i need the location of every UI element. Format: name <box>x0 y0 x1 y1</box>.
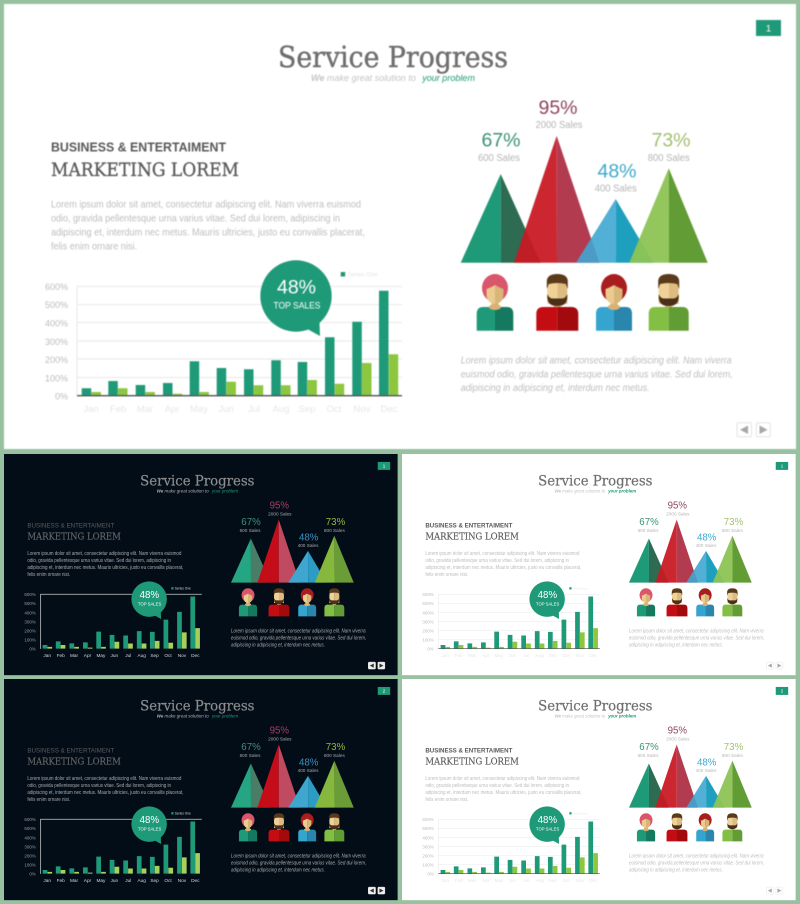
page badge <box>378 687 390 695</box>
title: Service Progress <box>538 473 652 489</box>
panel: light slide top right <box>402 454 796 675</box>
text block: italic paragraph: adipiscing in adipiscing et, interdum nec metus. <box>231 867 325 873</box>
panel: light slide bottom right <box>402 679 796 900</box>
bar chart: 0% <box>427 872 434 877</box>
bar chart: 600% <box>24 817 36 822</box>
bar chart: 100% <box>24 638 36 643</box>
triangle chart: 48% <box>597 161 637 183</box>
bar chart: Oct <box>562 653 570 659</box>
bar chart: Apr <box>482 653 490 659</box>
triangle chart: 95% <box>668 501 687 512</box>
subtitle: We make great solution to your problem <box>555 488 636 494</box>
bar chart: Jul <box>523 653 529 659</box>
bar chart: Series One <box>573 811 588 815</box>
bar chart: Series One <box>175 811 191 815</box>
icon: man red <box>269 813 289 841</box>
callout: 48% top sales: 48% <box>140 590 159 601</box>
text block: intro paragraph: felis enim ornare nisi. <box>51 240 137 252</box>
icon: man green <box>324 588 344 616</box>
bar chart: Oct <box>164 653 172 659</box>
bar chart: Series One <box>573 586 588 590</box>
page badge: 1 <box>781 464 784 469</box>
bar chart: 100% <box>422 863 434 868</box>
triangle chart: 67% <box>241 517 261 528</box>
callout: 48% top sales <box>529 581 565 619</box>
title: Service Progress <box>140 698 254 714</box>
bar chart: May <box>96 878 106 884</box>
bar chart: Feb <box>57 878 65 884</box>
triangle chart: 95% <box>538 97 578 119</box>
bar chart: 300% <box>24 619 36 624</box>
triangle chart: 2000 Sales <box>268 512 292 518</box>
triangle chart: 800 Sales <box>648 153 690 164</box>
text block: intro paragraph: felis enim ornare nisi. <box>425 797 468 803</box>
triangle chart: 48% <box>697 532 717 543</box>
icon: woman blue <box>696 813 714 841</box>
icon: man red <box>269 588 289 616</box>
icon: woman teal <box>477 274 513 331</box>
heading: marketing: MARKETING LOREM <box>425 756 519 767</box>
heading: marketing: MARKETING LOREM <box>27 531 121 542</box>
navigation arrows <box>368 887 385 894</box>
bar chart: 200% <box>422 853 434 858</box>
text block: italic paragraph: euismod odio, gravida pellentesque urna varius vitae. Sed dui lorem, <box>231 636 366 642</box>
callout: 48% top sales <box>260 260 332 336</box>
triangle chart: 73% <box>724 517 744 528</box>
bar chart: Dec <box>191 878 200 884</box>
callout: 48% top sales <box>529 806 565 844</box>
text block: intro paragraph: odio, gravida pellentesque urna varius vitae. Sed dui lorem, adipiscing in <box>425 783 569 789</box>
callout: 48% top sales <box>131 581 167 619</box>
bar chart: 200% <box>24 853 36 858</box>
bar chart: 600% <box>422 817 434 822</box>
icon: man green <box>649 274 689 331</box>
subtitle: We make great solution to your problem <box>311 73 475 84</box>
bar chart: Jan <box>43 653 51 659</box>
icon: woman blue <box>298 588 316 616</box>
page badge: 2 <box>781 689 784 694</box>
bar chart: Dec <box>191 653 200 659</box>
navigation arrows <box>737 423 770 437</box>
triangle chart: 67% <box>241 742 261 753</box>
icon: man red <box>667 813 687 841</box>
triangle chart: 48% <box>697 757 717 768</box>
callout: 48% top sales: 48% <box>277 276 316 298</box>
bar chart: Jul <box>248 404 260 415</box>
text block: intro paragraph: felis enim ornare nisi. <box>27 797 70 803</box>
bar chart: 600% <box>45 282 68 292</box>
text block: intro paragraph: adipiscing et, interdum nec metus. Mauris ultricies, justo eu convallis placerat, <box>27 565 183 571</box>
icon: woman blue <box>696 588 714 616</box>
bar chart: Jan <box>441 653 449 659</box>
callout: 48% top sales: TOP SALES <box>138 601 161 607</box>
bar chart <box>24 586 202 659</box>
bar chart: Aug <box>273 404 289 415</box>
bar chart: 400% <box>422 835 434 840</box>
bar chart <box>24 811 202 884</box>
navigation arrows <box>766 887 783 894</box>
triangle chart: 2000 Sales <box>666 512 690 518</box>
text block: italic paragraph: Lorem ipsum dolor sit amet, consectetur adipiscing elit. Nam viverra <box>231 854 366 860</box>
bar chart: 400% <box>45 318 68 328</box>
bar chart: 300% <box>422 619 434 624</box>
bar chart: Series One <box>175 586 191 590</box>
bar chart: Sep <box>150 653 159 659</box>
bar chart: Feb <box>110 404 126 415</box>
heading: business: BUSINESS & ENTERTAIMENT <box>425 747 512 754</box>
bar chart: Jun <box>509 653 517 659</box>
bar chart: 400% <box>422 610 434 615</box>
bar chart: Jun <box>111 653 119 659</box>
bar chart: Mar <box>70 878 79 884</box>
text block: italic paragraph: euismod odio, gravida pellentesque urna varius vitae. Sed dui lorem, <box>231 861 366 867</box>
bar chart: May <box>494 653 504 659</box>
bar chart: 200% <box>45 355 68 365</box>
bar chart: 100% <box>24 863 36 868</box>
triangle chart: 73% <box>326 742 346 753</box>
bar chart: Jul <box>125 878 131 884</box>
title: Service Progress <box>140 473 254 489</box>
bar chart: 300% <box>24 844 36 849</box>
triangle chart: 400 Sales <box>696 543 717 549</box>
bar chart: Sep <box>548 653 557 659</box>
bar chart: Sep <box>548 878 557 884</box>
text block: intro paragraph: odio, gravida pellentesque urna varius vitae. Sed dui lorem, adipiscing in <box>425 558 569 564</box>
heading: marketing: MARKETING LOREM <box>51 159 239 181</box>
triangle chart <box>629 726 752 808</box>
triangle chart: 800 Sales <box>722 753 743 759</box>
bar chart: Nov <box>576 878 585 884</box>
page badge <box>776 687 788 695</box>
navigation arrows <box>368 662 385 669</box>
text block: intro paragraph <box>27 551 183 578</box>
bar chart: Mar <box>137 404 153 415</box>
icon: woman teal <box>239 813 257 841</box>
bar chart: Apr <box>84 878 92 884</box>
icon: woman teal <box>637 588 655 616</box>
bar chart: Dec <box>589 878 598 884</box>
triangle chart <box>461 97 708 263</box>
bar chart: 200% <box>422 628 434 633</box>
text block: intro paragraph: felis enim ornare nisi. <box>425 572 468 578</box>
title: Service Progress <box>538 698 652 714</box>
text block: italic paragraph: Lorem ipsum dolor sit amet, consectetur adipiscing elit. Nam viverra <box>629 854 764 860</box>
text block: italic paragraph <box>461 354 733 394</box>
heading: business: BUSINESS & ENTERTAIMENT <box>27 522 114 529</box>
text block: italic paragraph <box>629 629 764 648</box>
heading: marketing: MARKETING LOREM <box>27 756 121 767</box>
icon: man green <box>722 588 742 616</box>
triangle chart: 48% <box>299 757 319 768</box>
subtitle: We make great solution to your problem <box>555 713 636 719</box>
bar chart: Sep <box>150 878 159 884</box>
bar chart: Feb <box>57 653 65 659</box>
bar chart: 500% <box>422 601 434 606</box>
bar chart: May <box>190 404 208 415</box>
text block: italic paragraph: adipiscing in adipiscing et, interdum nec metus. <box>629 867 723 873</box>
bar chart: 0% <box>29 872 36 877</box>
page badge <box>776 462 788 470</box>
icon: man green <box>324 813 344 841</box>
bar chart: Apr <box>482 878 490 884</box>
triangle chart: 67% <box>639 742 659 753</box>
bar chart: 600% <box>24 592 36 597</box>
bar chart: Jun <box>111 878 119 884</box>
bar chart: Dec <box>381 404 398 415</box>
text block: italic paragraph: adipiscing in adipiscing et, interdum nec metus. <box>629 642 723 648</box>
panel: main light slide <box>4 4 796 449</box>
triangle chart: 400 Sales <box>298 543 319 549</box>
bar chart: Jun <box>218 404 234 415</box>
bar chart: 500% <box>422 826 434 831</box>
bar chart: Oct <box>327 404 342 415</box>
bar chart: Nov <box>354 404 371 415</box>
triangle chart: 95% <box>270 726 289 737</box>
triangle chart: 2000 Sales <box>666 737 690 743</box>
text block: italic paragraph: Lorem ipsum dolor sit amet, consectetur adipiscing elit. Nam viverra <box>231 629 366 635</box>
text block: intro paragraph: felis enim ornare nisi. <box>27 572 70 578</box>
bar chart: May <box>96 653 106 659</box>
bar chart: Feb <box>455 878 463 884</box>
text block: italic paragraph: adipiscing in adipiscing et, interdum nec metus. <box>461 382 650 394</box>
text block: italic paragraph: euismod odio, gravida pellentesque urna varius vitae. Sed dui lorem, <box>461 368 733 380</box>
bar chart: Jul <box>523 878 529 884</box>
bar chart <box>422 811 600 884</box>
bar chart: 300% <box>422 844 434 849</box>
bar chart: Apr <box>84 653 92 659</box>
bar chart: 400% <box>24 835 36 840</box>
bar chart: Apr <box>165 404 179 415</box>
triangle chart: 95% <box>668 726 687 737</box>
text block: italic paragraph: Lorem ipsum dolor sit amet, consectetur adipiscing elit. Nam viverra <box>461 354 732 366</box>
bar chart: Oct <box>562 878 570 884</box>
bar chart: 500% <box>45 300 68 310</box>
text block: italic paragraph: Lorem ipsum dolor sit amet, consectetur adipiscing elit. Nam viverra <box>629 629 764 635</box>
bar chart: Nov <box>576 653 585 659</box>
callout: 48% top sales: 48% <box>538 590 557 601</box>
bar chart: Jan <box>83 404 99 415</box>
triangle chart: 800 Sales <box>722 528 743 534</box>
panel: dark slide top left <box>4 454 398 675</box>
callout: 48% top sales: TOP SALES <box>274 301 320 312</box>
text block: intro paragraph: Lorem ipsum dolor sit amet, consectetur adipiscing elit. Nam viverra euismod <box>425 551 580 557</box>
panel: dark slide bottom left <box>4 679 398 900</box>
triangle chart: 800 Sales <box>324 528 345 534</box>
text block: intro paragraph <box>425 776 581 803</box>
text block: intro paragraph: adipiscing et, interdum nec metus. Mauris ultricies, justo eu convallis placerat, <box>425 565 581 571</box>
text block: intro paragraph <box>425 551 581 578</box>
bar chart: Feb <box>455 653 463 659</box>
callout: 48% top sales: 48% <box>538 815 557 826</box>
text block: intro paragraph <box>27 776 183 803</box>
bar chart: 0% <box>427 647 434 652</box>
triangle chart: 600 Sales <box>240 753 261 759</box>
triangle chart: 73% <box>651 130 691 152</box>
bar chart: May <box>494 878 504 884</box>
bar chart: 500% <box>24 601 36 606</box>
triangle chart: 2000 Sales <box>268 737 292 743</box>
bar chart: Mar <box>70 653 79 659</box>
triangle chart: 800 Sales <box>324 753 345 759</box>
bar chart: Nov <box>178 653 187 659</box>
triangle chart <box>231 726 354 808</box>
text block: intro paragraph: Lorem ipsum dolor sit amet, consectetur adipiscing elit. Nam viverra euismod <box>27 551 182 557</box>
text block: intro paragraph: odio, gravida pellentesque urna varius vitae. Sed dui lorem, adipiscing in <box>27 558 171 564</box>
triangle chart: 67% <box>481 130 521 152</box>
callout: 48% top sales: 48% <box>140 815 159 826</box>
page badge: 1 <box>766 24 771 34</box>
bar chart: Aug <box>535 653 544 659</box>
text block: italic paragraph <box>231 629 366 648</box>
triangle chart: 73% <box>724 742 744 753</box>
bar chart: 200% <box>24 628 36 633</box>
subtitle: We make great solution to your problem <box>157 713 238 719</box>
text block: intro paragraph <box>51 198 365 252</box>
icon: woman teal <box>239 588 257 616</box>
text block: italic paragraph: euismod odio, gravida pellentesque urna varius vitae. Sed dui lorem, <box>629 636 764 642</box>
page badge: 1 <box>383 464 386 469</box>
bar chart: 600% <box>422 592 434 597</box>
triangle chart: 600 Sales <box>478 153 520 164</box>
heading: business: BUSINESS & ENTERTAIMENT <box>27 747 114 754</box>
heading: business: BUSINESS & ENTERTAIMENT <box>425 522 512 529</box>
bar chart: Mar <box>468 653 477 659</box>
title: Service Progress <box>278 40 508 74</box>
bar chart: 500% <box>24 826 36 831</box>
bar chart <box>45 272 402 415</box>
bar chart: Jun <box>509 878 517 884</box>
triangle chart: 2000 Sales <box>536 120 582 131</box>
page badge: 2 <box>383 689 386 694</box>
bar chart: Dec <box>589 653 598 659</box>
bar chart: 400% <box>24 610 36 615</box>
triangle chart: 600 Sales <box>240 528 261 534</box>
callout: 48% top sales: TOP SALES <box>536 601 559 607</box>
callout: 48% top sales <box>131 806 167 844</box>
text block: intro paragraph: adipiscing et, interdum nec metus. Mauris ultricies, justo eu convallis placerat, <box>51 226 365 238</box>
heading: marketing: MARKETING LOREM <box>425 531 519 542</box>
bar chart: 0% <box>55 392 68 402</box>
bar chart: Series One <box>348 272 378 278</box>
icon: woman blue <box>298 813 316 841</box>
triangle chart: 400 Sales <box>595 184 637 194</box>
triangle chart <box>629 501 752 583</box>
bar chart: Aug <box>535 878 544 884</box>
bar chart: 100% <box>45 374 68 384</box>
triangle chart: 600 Sales <box>638 753 659 759</box>
page badge <box>756 20 781 36</box>
icon: man red <box>536 274 578 331</box>
page badge <box>378 462 390 470</box>
navigation arrows <box>766 662 783 669</box>
triangle chart: 67% <box>639 517 659 528</box>
text block: intro paragraph: adipiscing et, interdum nec metus. Mauris ultricies, justo eu convallis placerat, <box>27 790 183 796</box>
text block: intro paragraph: Lorem ipsum dolor sit amet, consectetur adipiscing elit. Nam viverra euismod <box>27 776 182 782</box>
text block: italic paragraph: euismod odio, gravida pellentesque urna varius vitae. Sed dui lorem, <box>629 861 764 867</box>
bar chart: Jan <box>441 878 449 884</box>
text block: intro paragraph: Lorem ipsum dolor sit amet, consectetur adipiscing elit. Nam viverra euismod <box>425 776 580 782</box>
bar chart: Sep <box>299 404 315 415</box>
triangle chart: 400 Sales <box>696 768 717 774</box>
triangle chart: 73% <box>326 517 346 528</box>
heading: business: BUSINESS & ENTERTAIMENT <box>51 140 226 154</box>
bar chart: Jul <box>125 653 131 659</box>
text block: intro paragraph: adipiscing et, interdum nec metus. Mauris ultricies, justo eu convallis placerat, <box>425 790 581 796</box>
bar chart <box>422 586 600 659</box>
triangle chart: 95% <box>270 501 289 512</box>
text block: italic paragraph: adipiscing in adipiscing et, interdum nec metus. <box>231 642 325 648</box>
triangle chart: 48% <box>299 532 319 543</box>
triangle chart: 600 Sales <box>638 528 659 534</box>
bar chart: 100% <box>422 638 434 643</box>
bar chart: 300% <box>45 337 68 347</box>
text block: italic paragraph <box>629 854 764 873</box>
triangle chart <box>231 501 354 583</box>
text block: intro paragraph: odio, gravida pellentesque urna varius vitae. Sed dui lorem, adipiscing in <box>51 212 340 224</box>
icon: man red <box>667 588 687 616</box>
triangle chart: 400 Sales <box>298 768 319 774</box>
text block: italic paragraph <box>231 854 366 873</box>
text block: intro paragraph: odio, gravida pellentesque urna varius vitae. Sed dui lorem, adipiscing in <box>27 783 171 789</box>
bar chart: Aug <box>137 878 146 884</box>
bar chart: 0% <box>29 647 36 652</box>
text block: intro paragraph: Lorem ipsum dolor sit amet, consectetur adipiscing elit. Nam viverra euismod <box>51 198 361 210</box>
icon: woman teal <box>637 813 655 841</box>
callout: 48% top sales: TOP SALES <box>536 826 559 832</box>
subtitle: We make great solution to your problem <box>157 488 238 494</box>
bar chart: Nov <box>178 878 187 884</box>
bar chart: Oct <box>164 878 172 884</box>
callout: 48% top sales: TOP SALES <box>138 826 161 832</box>
icon: man green <box>722 813 742 841</box>
bar chart: Jan <box>43 878 51 884</box>
icon: woman blue <box>596 274 632 331</box>
bar chart: Mar <box>468 878 477 884</box>
bar chart: Aug <box>137 653 146 659</box>
